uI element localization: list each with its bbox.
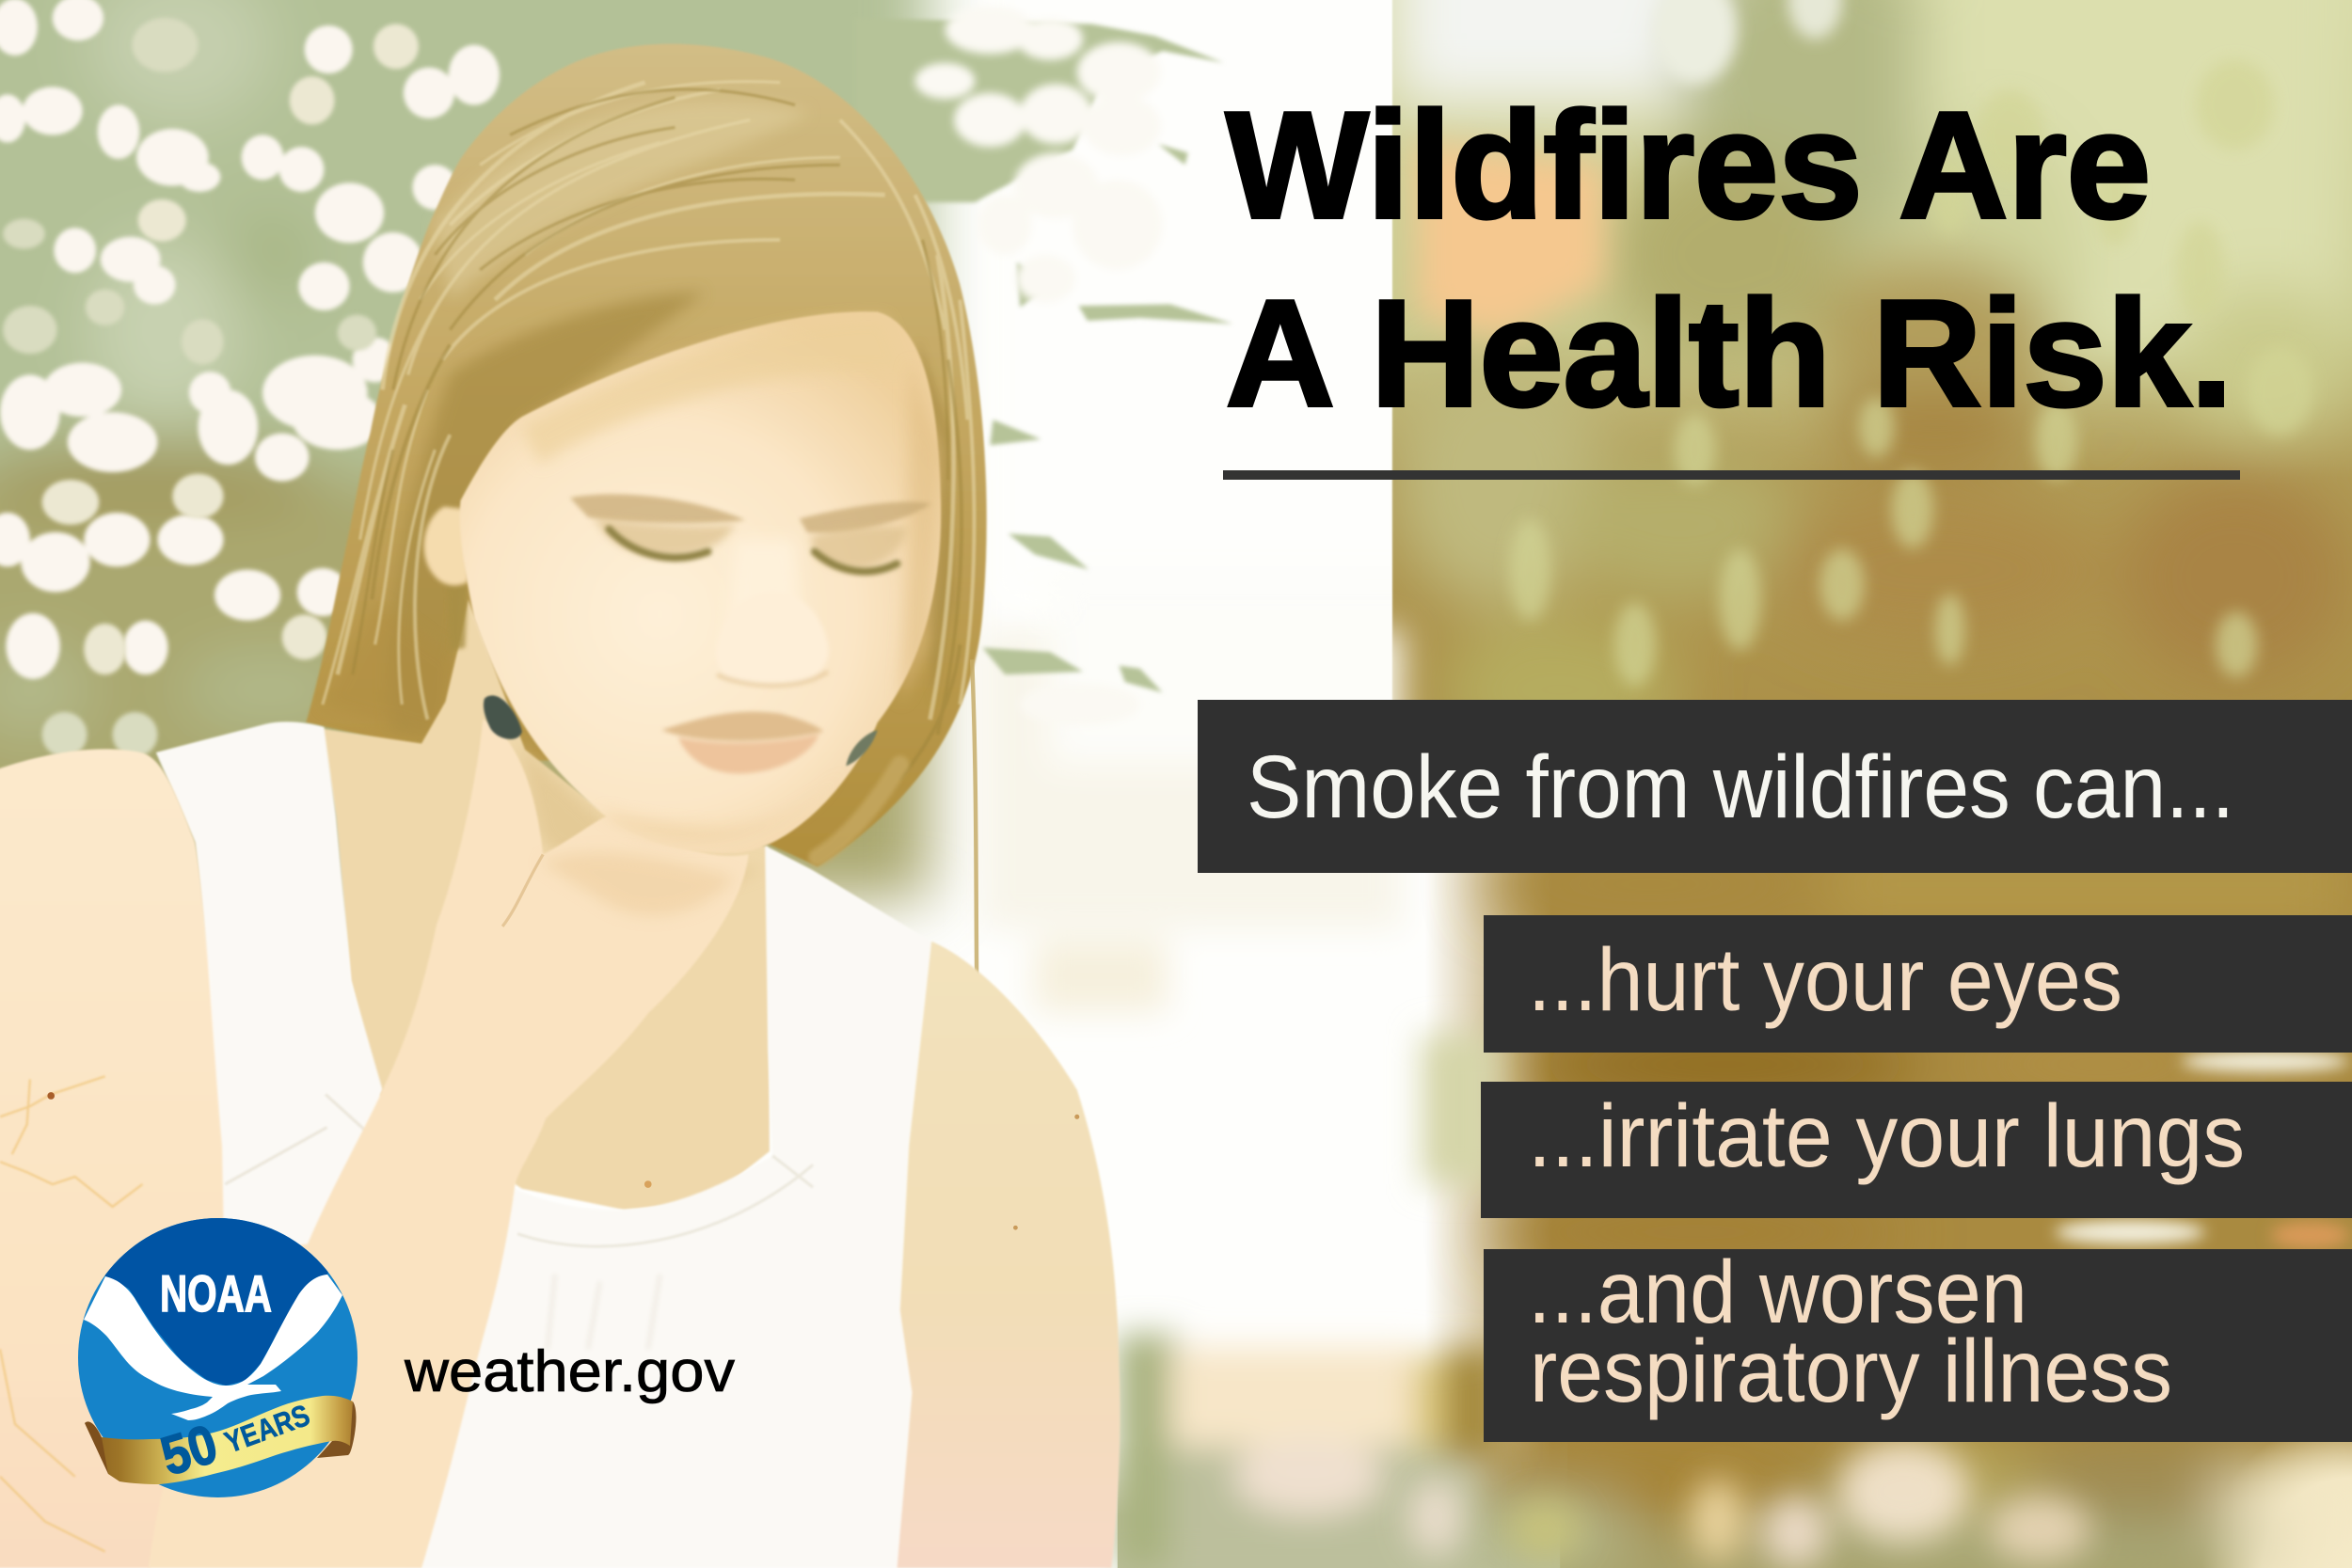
tank top: [156, 721, 931, 1568]
right arm: [897, 942, 1120, 1568]
hair over jaw: [818, 765, 900, 858]
gull: [84, 1275, 342, 1420]
chin shade: [600, 765, 848, 841]
worsen text: ...and worsen: [1528, 1243, 2027, 1342]
shadow on neck under jaw: [517, 742, 765, 914]
gold ribbon: [85, 1396, 356, 1484]
unblurred tree base colours with soft edges: [1118, 0, 2352, 1568]
ribbon text 50: 50: [154, 1413, 224, 1487]
ear: [424, 507, 471, 585]
title rule: [1223, 470, 2240, 480]
nose: [716, 540, 829, 687]
logo: NOAA 50 years: [75, 1204, 362, 1505]
pale wall lower area: [982, 629, 1503, 1568]
logo disc: [75, 1204, 362, 1505]
white foliage blobs: [915, 6, 1163, 725]
woman: [0, 44, 1120, 1568]
soft bokeh on right trees: [1509, 60, 2313, 687]
bokeh highlights behind woman: [0, 0, 500, 679]
ribbon text YEARS: YEARS: [220, 1398, 314, 1460]
forehead shade: [522, 318, 908, 465]
panel: irritate your lungs: [1481, 1082, 2352, 1218]
worsen text: respiratory illness: [1530, 1322, 2172, 1421]
fingernails: [484, 695, 878, 766]
website: weather.gov: [404, 1339, 735, 1404]
neck and chest: [321, 599, 770, 1210]
eyes text: ...hurt your eyes: [1528, 930, 2122, 1030]
intro text: Smoke from wildfires can...: [1247, 737, 2234, 837]
eyebrows: [570, 494, 931, 533]
mouth: [661, 712, 823, 773]
eye sockets: [593, 517, 908, 569]
worsen text: [1528, 1243, 2172, 1421]
forearm and hand: [149, 720, 749, 1568]
panel: worsen respiratory illness: [1484, 1243, 2352, 1442]
skin moles: [47, 1092, 1079, 1230]
panel: smoke intro: [1198, 700, 2352, 873]
loose hair strand: [972, 659, 978, 1094]
dark shadow under ear: [447, 585, 468, 651]
face: [460, 311, 941, 853]
leaves by the wall: [855, 18, 1233, 692]
white wall with sharp right edge: [1053, 0, 1394, 762]
eyelashes: [609, 530, 897, 572]
hand shading: [540, 852, 735, 915]
hair: [306, 44, 987, 866]
lungs text: ...irritate your lungs: [1528, 1086, 2245, 1186]
orange building glow: [1418, 142, 1605, 338]
NOAA wordmark: NOAA: [160, 1264, 272, 1323]
title line 1: Wildfires Are: [1226, 81, 2151, 250]
panel: hurt your eyes: [1484, 915, 2352, 1053]
title line 2: A Health Risk.: [1226, 269, 2233, 438]
left upper arm: [0, 749, 225, 1568]
skin veins on arm: [0, 1076, 142, 1551]
